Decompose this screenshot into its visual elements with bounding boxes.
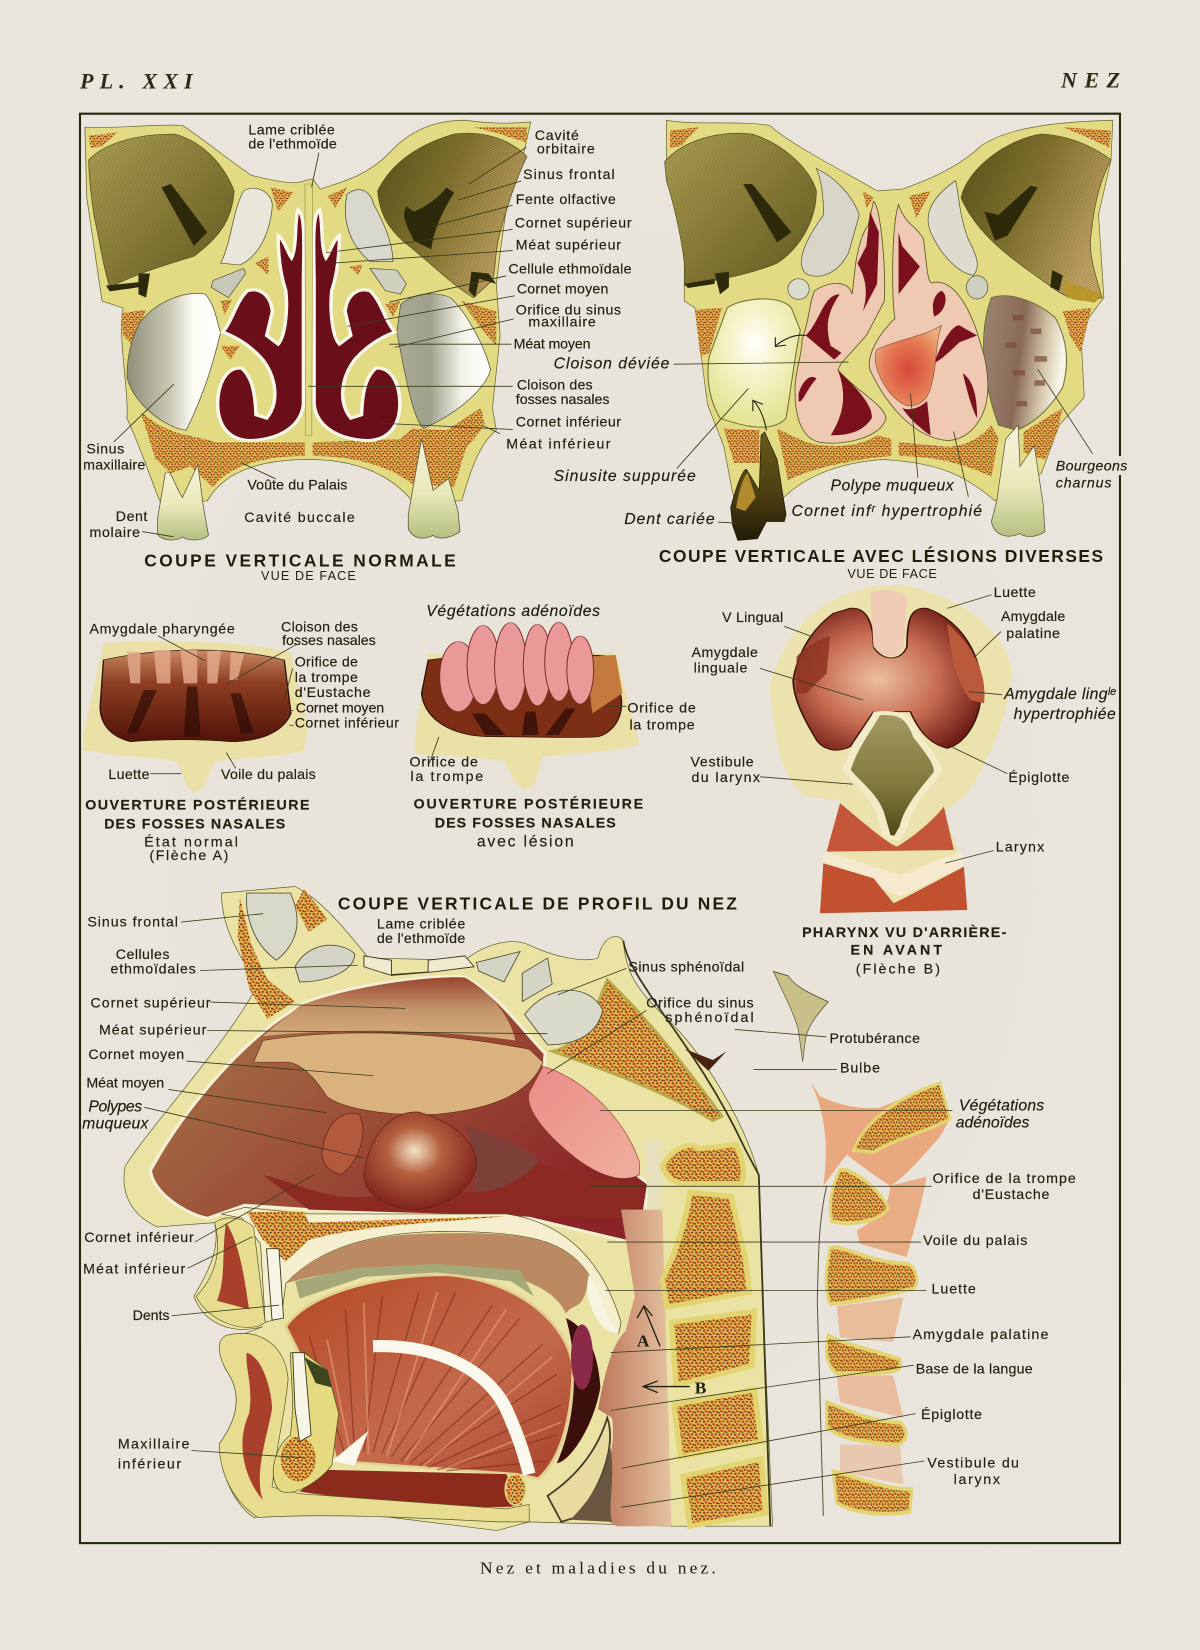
labels: normal choanae: DES FOSSES NASALES bbox=[104, 816, 285, 832]
plate number: PL. XXI bbox=[79, 68, 194, 93]
labels: sagittal section: de l'ethmoïde bbox=[377, 931, 465, 947]
illustration: normal vertical section bbox=[85, 120, 531, 540]
labels: pharynx: linguale bbox=[694, 661, 747, 677]
labels: normal choanae: État normal bbox=[144, 833, 238, 850]
nasal cavity right bbox=[314, 210, 400, 441]
nasal septum bbox=[305, 184, 313, 435]
labels: sagittal section: A bbox=[637, 1331, 650, 1350]
labels: adenoid vegetations: la trompe bbox=[629, 717, 695, 733]
healthy molar bbox=[991, 425, 1045, 537]
middle turbinate bbox=[254, 1033, 543, 1115]
header and frame bbox=[79, 67, 1120, 1578]
panel: pharynx vu d'arriere bbox=[691, 585, 1117, 978]
labels: normal choanae: Cloison des bbox=[281, 620, 358, 636]
labels: pharynx: PHARYNX VU D'ARRIÈRE- bbox=[802, 924, 1007, 941]
ethmoid cell bbox=[295, 945, 355, 982]
mucous polyp bbox=[875, 325, 941, 406]
labels: normal choanae: (Flèche A) bbox=[149, 848, 228, 864]
oropharynx bbox=[557, 1318, 600, 1463]
labels: normal section: Sinus frontal bbox=[523, 167, 615, 183]
labels: sagittal section: B bbox=[695, 1379, 707, 1398]
sinus with fleshy buds bbox=[984, 296, 1067, 430]
labels: normal section: Cornet supérieur bbox=[515, 215, 632, 231]
labels: sagittal section: Dents bbox=[133, 1308, 169, 1324]
labels: pharynx: (Flèche B) bbox=[856, 962, 940, 978]
labels: normal section: Dent bbox=[116, 509, 147, 525]
labels: normal choanae: Cornet inférieur bbox=[295, 715, 399, 731]
labels: sagittal section: Végétations bbox=[959, 1097, 1044, 1114]
maxillary sinuses bbox=[127, 293, 221, 430]
labels: normal section: Méat supérieur bbox=[516, 237, 621, 253]
labels: sagittal section: Cellules bbox=[116, 947, 169, 963]
left orbit bbox=[89, 134, 234, 287]
labels: pharynx: palatine bbox=[1006, 626, 1060, 642]
sphenoid bone bbox=[552, 980, 722, 1121]
labels: sagittal section: Maxillaire bbox=[118, 1436, 190, 1452]
labels: normal section: Méat inférieur bbox=[506, 436, 611, 452]
nasal bone marrow bbox=[238, 889, 327, 1019]
labels: pharynx: Amygdale bbox=[1001, 609, 1065, 625]
labels: normal choanae: Orifice de bbox=[295, 654, 358, 670]
neck muscle bbox=[827, 803, 954, 852]
vertebra sections bbox=[826, 1170, 917, 1514]
labels: lesions section: Cloison déviée bbox=[554, 355, 670, 372]
marrow patches bbox=[121, 301, 496, 487]
labels: sagittal section: Méat supérieur bbox=[99, 1023, 207, 1039]
marrow patches bbox=[695, 308, 1091, 480]
labels: normal choanae bbox=[85, 620, 399, 864]
labels: sagittal section: COUPE VERTICALE DE PROFIL DU NEZ bbox=[338, 893, 737, 913]
labels: sagittal section: Polypes bbox=[88, 1099, 142, 1116]
labels: normal choanae: Voile du palais bbox=[221, 767, 316, 783]
labels: lesions section: Sinusite suppurée bbox=[554, 468, 696, 485]
labels: adenoid vegetations: Végétations adénoïdes bbox=[426, 603, 600, 620]
labels: pharynx: Larynx bbox=[996, 840, 1044, 856]
labels: pharynx: Luette bbox=[994, 585, 1036, 601]
labels: normal section: Voûte du Palais bbox=[247, 477, 347, 493]
labels: adenoid vegetations: avec lésion bbox=[477, 833, 574, 850]
labels: sagittal section: Bulbe bbox=[840, 1061, 880, 1077]
uvula bbox=[870, 590, 907, 657]
pharyngeal wall bbox=[589, 1210, 672, 1526]
labels: normal choanae: la trompe bbox=[295, 670, 358, 686]
labels: normal section: maxillaire bbox=[83, 457, 145, 473]
labels: pharynx: Amygdale bbox=[692, 645, 758, 661]
labels: sagittal section bbox=[82, 893, 1076, 1507]
cribriform plate bbox=[364, 956, 474, 975]
right orbit bbox=[378, 133, 527, 298]
hard palate bbox=[222, 1207, 621, 1333]
palatine tonsil bbox=[571, 1325, 593, 1390]
labels: normal section: Lame criblée bbox=[248, 123, 335, 139]
labels: normal section: orbitaire bbox=[537, 142, 595, 158]
labels: sagittal section: Orifice du sinus bbox=[646, 995, 754, 1011]
labels: sagittal section: Cornet moyen bbox=[88, 1047, 184, 1063]
nasal cavity left bbox=[218, 210, 304, 441]
labels: normal choanae: Luette bbox=[108, 767, 150, 783]
illustration: section with lesions bbox=[665, 120, 1113, 540]
labels: sagittal section: larynx bbox=[954, 1472, 1000, 1488]
illustration: sagittal head section bbox=[124, 887, 773, 1531]
labels: normal section: Fente olfactive bbox=[516, 192, 616, 208]
lower incisor bbox=[293, 1353, 311, 1442]
labels: sagittal section: Base de la langue bbox=[916, 1362, 1033, 1378]
labels: pharynx: Épiglotte bbox=[1008, 769, 1070, 786]
labels: normal section: Cavité bbox=[535, 128, 579, 144]
labels: sagittal section: inférieur bbox=[118, 1456, 181, 1472]
pus-filled sinus bbox=[708, 299, 800, 427]
panel: ouverture posterieure, avec lesion bbox=[409, 603, 696, 850]
frontal sinus bbox=[246, 893, 297, 960]
illustration: adenoid vegetations bbox=[415, 622, 639, 790]
labels: normal section: molaire bbox=[89, 525, 140, 541]
sphenoid sinus bbox=[525, 990, 603, 1045]
epiglottis bbox=[847, 713, 938, 838]
labels: sagittal section: Vestibule du bbox=[927, 1455, 1019, 1471]
labels: sagittal section: Méat moyen bbox=[86, 1075, 164, 1091]
labels: normal choanae: d'Eustache bbox=[295, 685, 371, 701]
labels: sagittal section: Protubérance bbox=[829, 1031, 920, 1047]
panel: coupe verticale de profil bbox=[82, 887, 1076, 1531]
labels: pharynx: V Lingual bbox=[722, 610, 783, 626]
labels: adenoid vegetations: Orifice de bbox=[409, 754, 478, 770]
labels: normal choanae: Amygdale pharyngée bbox=[89, 622, 235, 638]
labels: adenoid vegetations: la trompe bbox=[411, 769, 483, 785]
soft palate bbox=[587, 1275, 619, 1333]
labels: sagittal section: Orifice de la trompe bbox=[933, 1171, 1076, 1187]
labels: normal section: Cornet inférieur bbox=[516, 414, 621, 430]
chin and lower lip bbox=[219, 1333, 529, 1522]
tongue bbox=[286, 1275, 573, 1479]
labels: sagittal section: Cornet supérieur bbox=[91, 995, 211, 1011]
left orbit bbox=[665, 133, 816, 286]
labels: normal section: COUPE VERTICALE NORMALE bbox=[144, 550, 456, 570]
oral roof bbox=[286, 1233, 589, 1314]
labels: normal section: de l'ethmoïde bbox=[248, 136, 337, 152]
labels: pharynx: Amygdale lingˡᵉ bbox=[1003, 686, 1117, 703]
upper incisor bbox=[267, 1249, 284, 1320]
labels: normal section bbox=[83, 123, 632, 583]
epiglottis bbox=[548, 1418, 610, 1522]
tonsils bbox=[797, 637, 830, 693]
labels: sagittal section: Voile du palais bbox=[923, 1233, 1027, 1249]
labels: sagittal section: Sinus frontal bbox=[87, 914, 178, 930]
labels: normal choanae: OUVERTURE POSTÉRIEURE bbox=[85, 796, 309, 813]
muscle bands bbox=[837, 1177, 927, 1485]
right orbit bbox=[961, 134, 1111, 300]
small polyp bbox=[322, 1113, 363, 1175]
labels: normal section: Sinus bbox=[86, 442, 124, 458]
labels: normal section: Cornet moyen bbox=[517, 282, 608, 298]
right diseased nasal fossa bbox=[869, 205, 988, 441]
labels: pharynx: hypertrophiée bbox=[1014, 706, 1116, 723]
labels: sagittal section: Lame criblée bbox=[377, 916, 465, 932]
upper teeth row bbox=[295, 1264, 534, 1299]
labels: normal choanae: fosses nasales bbox=[282, 633, 376, 649]
labels: pharynx bbox=[691, 585, 1117, 978]
head silhouette bbox=[124, 887, 773, 1531]
labels: normal choanae: Cornet moyen bbox=[296, 701, 384, 717]
labels: lesions section: Cornet infʳ hypertrophié bbox=[792, 503, 982, 520]
labels: normal section: VUE DE FACE bbox=[261, 569, 356, 583]
pus arrows bbox=[753, 335, 806, 430]
illustration: pharynx bbox=[770, 585, 1011, 913]
arrow A bbox=[637, 1306, 660, 1346]
illustration: normal choanae bbox=[83, 641, 308, 793]
panel: ouverture posterieure, etat normal bbox=[83, 620, 399, 864]
labels: sagittal section: sphénoïdal bbox=[665, 1010, 754, 1026]
labels: pharynx: du larynx bbox=[692, 770, 760, 786]
labels: sagittal section: Épiglotte bbox=[921, 1406, 982, 1423]
labels: lesions section: Polype muqueux bbox=[831, 478, 955, 495]
throat cavity bbox=[793, 608, 981, 750]
floor muscles bbox=[300, 1470, 522, 1507]
upper soft tissue bbox=[810, 1081, 950, 1186]
labels: sagittal section: d'Eustache bbox=[973, 1187, 1050, 1203]
labels: lesions section: Dent cariée bbox=[624, 511, 715, 528]
tongue white septum bbox=[373, 1346, 529, 1474]
labels: lesions section: Bourgeons bbox=[1056, 459, 1127, 475]
teeth left bbox=[158, 465, 208, 540]
labels: pharynx: EN AVANT bbox=[851, 943, 942, 959]
illustration: spinal cord section bbox=[773, 971, 950, 1516]
ethmoid cells bbox=[801, 168, 859, 276]
large polyp bbox=[364, 1112, 477, 1210]
labels: lesions section bbox=[554, 355, 1127, 581]
superior turbinate bbox=[263, 977, 515, 1040]
labels: normal section: Cellule ethmoïdale bbox=[508, 262, 632, 278]
labels: pharynx: Vestibule bbox=[691, 754, 754, 770]
labels: lesions section: charnus bbox=[1056, 475, 1112, 491]
labels: adenoid vegetations bbox=[409, 603, 696, 850]
labels: normal section: maxillaire bbox=[528, 314, 596, 330]
labels: adenoid vegetations: OUVERTURE POSTÉRIEURE bbox=[414, 795, 643, 812]
panel: coupe verticale avec lesions bbox=[554, 120, 1127, 581]
posterior spinal outline bbox=[623, 941, 770, 1526]
arrow B bbox=[643, 1381, 690, 1393]
plate frame bbox=[80, 114, 1120, 1543]
cover: frame gap behind label bbox=[1115, 456, 1127, 475]
tongue muscle fibres bbox=[309, 1292, 561, 1471]
inferior dark tissue bbox=[263, 1162, 639, 1218]
decayed molar bbox=[731, 432, 786, 540]
labels: normal section: fosses nasales bbox=[516, 392, 609, 408]
labels: sagittal section: adénoïdes bbox=[956, 1114, 1030, 1131]
labels: adenoid vegetations: Orifice de bbox=[627, 701, 696, 717]
labels: sagittal section: Cornet inférieur bbox=[84, 1230, 194, 1246]
teeth right bbox=[408, 439, 460, 538]
labels: normal section: Orifice du sinus bbox=[516, 303, 621, 319]
ethmoid cells bbox=[221, 188, 272, 265]
adenoid vegetation bbox=[529, 1066, 639, 1178]
posterior lump bbox=[465, 1127, 538, 1192]
labels: normal section: Cavité buccale bbox=[244, 510, 355, 526]
upper lip bbox=[196, 1218, 265, 1327]
labels: sagittal section: Sinus sphénoïdal bbox=[628, 960, 744, 976]
nasal cavity bbox=[150, 977, 649, 1244]
labels: sagittal section: Méat inférieur bbox=[83, 1262, 186, 1278]
mandible bbox=[273, 1353, 339, 1492]
labels: normal section: Cloison des bbox=[517, 377, 593, 393]
caption: Nez et maladies du nez. bbox=[480, 1559, 716, 1578]
panel: coupe verticale normale bbox=[83, 120, 632, 583]
labels: lesions section: COUPE VERTICALE AVEC LÉSIONS DIVERSES bbox=[659, 546, 1103, 566]
labels: sagittal section: Amygdale palatine bbox=[913, 1327, 1048, 1343]
left diseased nasal fossa bbox=[795, 201, 886, 443]
labels: normal section: Méat moyen bbox=[514, 336, 591, 352]
labels: lesions section: VUE DE FACE bbox=[847, 567, 937, 581]
plate title: NEZ bbox=[1060, 67, 1120, 92]
labels: sagittal section: Luette bbox=[932, 1282, 976, 1298]
labels: sagittal section: ethmoïdales bbox=[111, 962, 196, 978]
labels: adenoid vegetations: DES FOSSES NASALES bbox=[435, 815, 616, 831]
pons bbox=[773, 971, 828, 1062]
cervical vertebrae bbox=[662, 1145, 766, 1526]
labels: sagittal section: muqueux bbox=[82, 1115, 150, 1132]
